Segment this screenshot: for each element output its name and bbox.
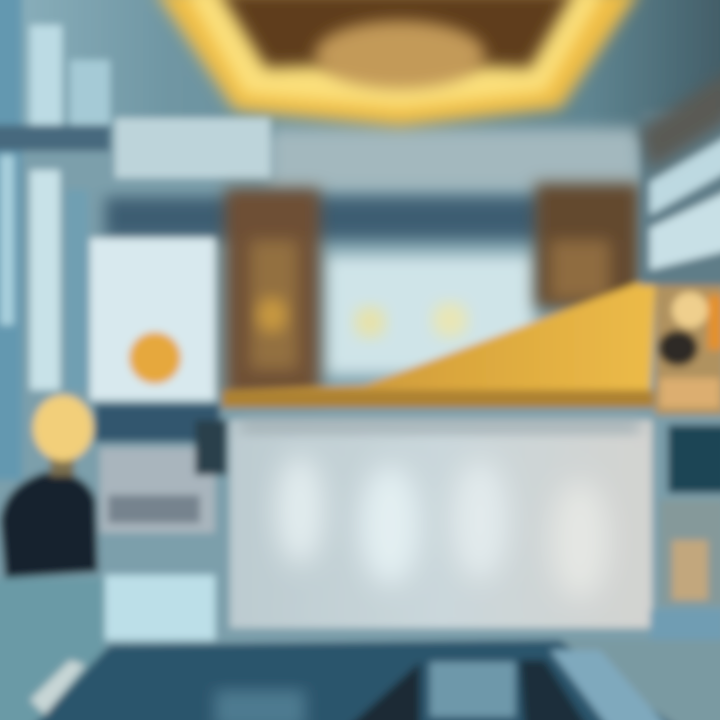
floor bottom [30, 640, 720, 720]
upper right dark beam [640, 70, 720, 170]
person neck [50, 450, 74, 476]
person [0, 395, 98, 578]
icon: orange circle [129, 332, 181, 384]
ceiling recess [218, 0, 575, 68]
ceiling [0, 0, 720, 190]
gold ramp [222, 282, 655, 408]
person body [0, 472, 98, 578]
chandelier [315, 21, 485, 89]
dark header band [105, 197, 545, 239]
floor left [0, 578, 105, 720]
right lower dark panel [650, 425, 720, 650]
lower left dark ledge [95, 404, 227, 640]
right windows [640, 110, 720, 285]
person head [33, 395, 93, 461]
wood columns [225, 183, 640, 398]
centre window [325, 255, 535, 375]
right side gold fixtures [655, 285, 720, 415]
left pale panel [90, 238, 215, 400]
left windows [0, 0, 270, 480]
gold ceiling cove [155, 0, 640, 126]
marble counter [230, 418, 652, 628]
